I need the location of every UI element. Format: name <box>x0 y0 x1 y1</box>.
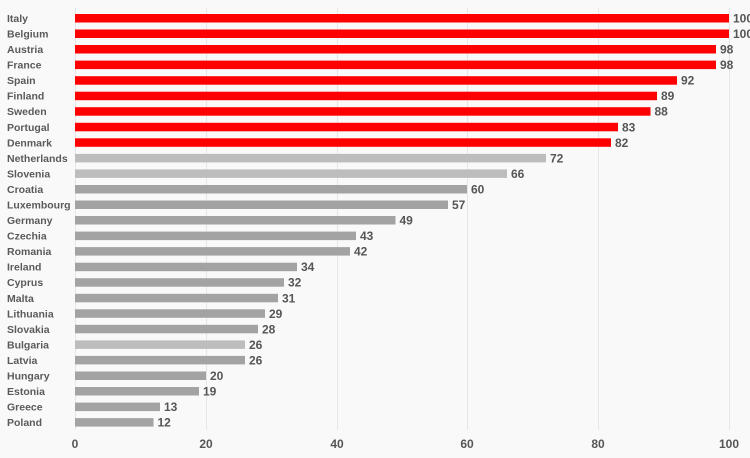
country labels: Ireland <box>7 262 41 274</box>
value labels: 26 <box>249 353 263 367</box>
x axis labels: 100 <box>719 437 739 451</box>
country labels: Belgium <box>7 28 48 40</box>
value labels: 49 <box>400 214 413 228</box>
country labels: Estonia <box>7 386 45 398</box>
value labels: 19 <box>203 384 217 398</box>
x axis labels: 20 <box>199 437 213 451</box>
country labels: Denmark <box>7 137 52 149</box>
country labels: Italy <box>7 13 28 25</box>
country labels: Cyprus <box>7 277 43 289</box>
country labels: Portugal <box>7 122 50 134</box>
country labels <box>7 13 71 429</box>
value labels: 60 <box>471 182 485 196</box>
x axis labels: 40 <box>330 437 344 451</box>
value labels: 42 <box>354 245 368 259</box>
bars <box>75 14 729 427</box>
value labels: 72 <box>550 151 564 165</box>
value labels: 89 <box>661 89 675 103</box>
country labels: Croatia <box>7 184 43 196</box>
value labels: 82 <box>615 136 629 150</box>
value labels: 13 <box>164 400 178 414</box>
value labels: 83 <box>622 120 636 134</box>
country labels: Slovakia <box>7 324 50 336</box>
country labels: Sweden <box>7 106 47 118</box>
x axis labels: 0 <box>72 437 79 451</box>
country labels: Luxembourg <box>7 200 71 212</box>
value labels: 32 <box>288 276 302 290</box>
value labels: 20 <box>210 369 224 383</box>
country labels: Lithuania <box>7 308 54 320</box>
country labels: Malta <box>7 293 34 305</box>
value labels: 31 <box>282 291 296 305</box>
country labels: Finland <box>7 91 44 103</box>
country labels: Greece <box>7 402 43 414</box>
country labels: Slovenia <box>7 168 50 180</box>
country labels: Hungary <box>7 370 50 382</box>
country labels: Bulgaria <box>7 339 49 351</box>
country labels: Latvia <box>7 355 38 367</box>
value labels: 34 <box>301 260 315 274</box>
value labels: 98 <box>720 58 734 72</box>
x axis labels: 80 <box>591 437 605 451</box>
country labels: France <box>7 60 42 72</box>
country labels: Spain <box>7 75 36 87</box>
value labels: 43 <box>360 229 374 243</box>
value labels: 29 <box>269 307 283 321</box>
value labels: 66 <box>511 167 525 181</box>
value labels: 12 <box>158 416 171 430</box>
value labels: 92 <box>681 74 695 88</box>
country labels: Romania <box>7 246 52 258</box>
x axis labels: 60 <box>460 437 474 451</box>
country labels: Czechia <box>7 231 47 243</box>
value labels: 28 <box>262 322 276 336</box>
value labels <box>158 12 750 430</box>
value labels: 98 <box>720 42 734 56</box>
value labels: 88 <box>654 105 668 119</box>
value labels: 26 <box>249 338 263 352</box>
country labels: Netherlands <box>7 153 68 165</box>
country labels: Germany <box>7 215 53 227</box>
country labels: Poland <box>7 417 42 429</box>
x axis labels <box>72 437 739 451</box>
value labels: 57 <box>452 198 466 212</box>
country labels: Austria <box>7 44 43 56</box>
